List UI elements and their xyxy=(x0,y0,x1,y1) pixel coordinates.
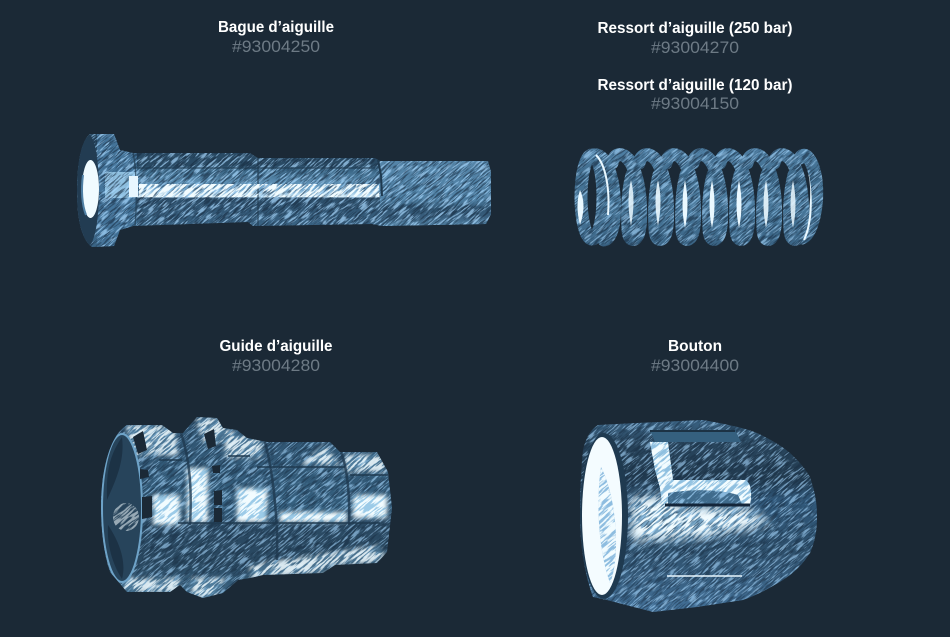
heading: Bouton: Bouton xyxy=(668,338,722,355)
illustration: needle spring xyxy=(574,148,824,246)
heading: Ressort d'aiguille 120 bar xyxy=(598,77,792,113)
illustration: needle bush xyxy=(70,130,500,250)
illustration: button xyxy=(575,415,825,615)
heading: Ressort d'aiguille 250 bar xyxy=(598,20,792,57)
heading: Guide d'aiguille xyxy=(220,338,333,375)
heading: Guide d'aiguille: #93004280 xyxy=(232,356,320,375)
notch xyxy=(650,430,751,576)
heading: Bouton: #93004400 xyxy=(651,356,739,375)
heading: Ressort d'aiguille 250 bar: #93004270 xyxy=(651,38,739,57)
heading: Ressort d'aiguille 120 bar: #93004150 xyxy=(651,94,739,113)
heading: Ressort d'aiguille 250 bar: Ressort d’aiguille (250 bar) xyxy=(598,20,792,37)
heading: Bague d'aiguille: Bague d’aiguille xyxy=(218,19,334,36)
highlight band xyxy=(150,464,390,528)
heading: Guide d'aiguille: Guide d’aiguille xyxy=(220,338,333,355)
heading: Bague d'aiguille xyxy=(218,19,334,56)
heading: Bague d'aiguille: #93004250 xyxy=(232,37,320,56)
heading: Ressort d'aiguille 120 bar: Ressort d’aiguille (120 bar) xyxy=(598,77,792,94)
rim highlights xyxy=(119,417,388,598)
heading: Bouton xyxy=(651,338,739,375)
illustration: needle guide xyxy=(95,410,395,605)
